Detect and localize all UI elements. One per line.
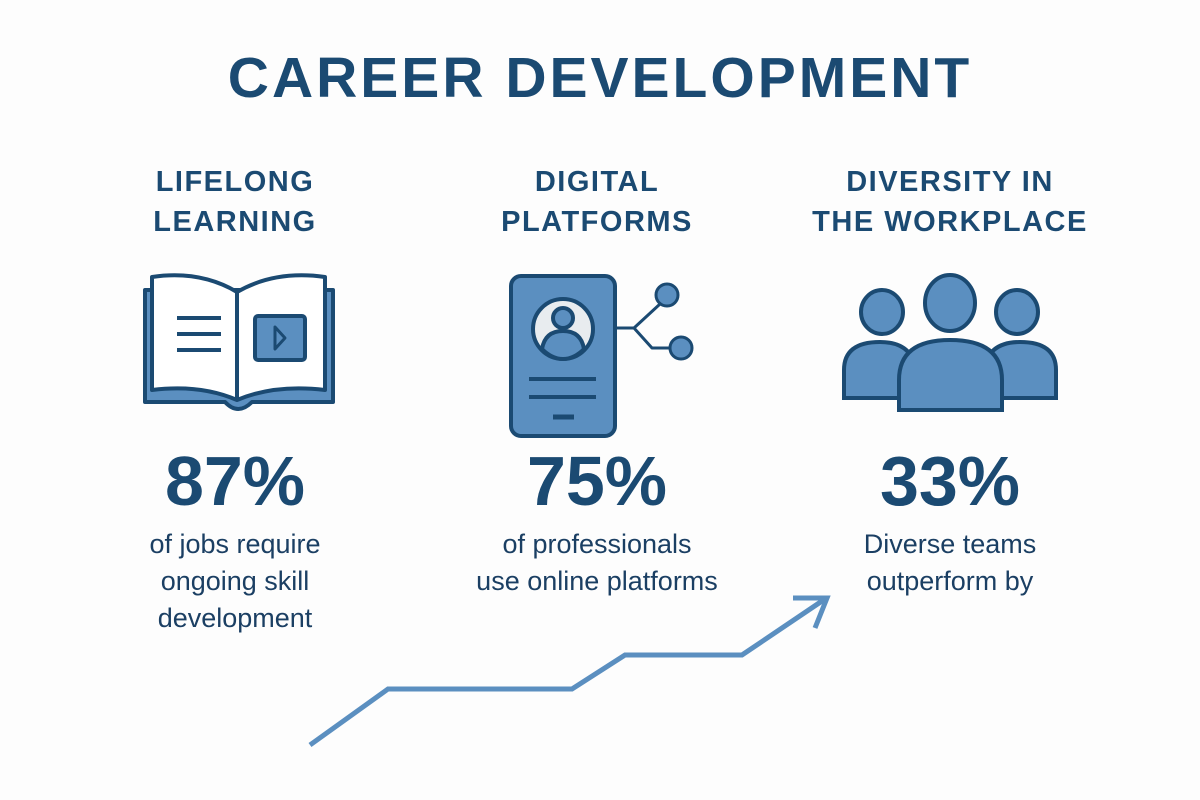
text: 33% description	[864, 529, 1036, 596]
stat: 87%: 87%	[165, 442, 305, 520]
text: 75% description	[476, 529, 718, 596]
heading: digital platforms: PLATFORMS	[501, 206, 693, 238]
heading: diversity: DIVERSITY IN	[846, 166, 1054, 198]
heading: lifelong learning: LIFELONG	[156, 166, 314, 198]
text: 33% description: outperform by	[867, 566, 1033, 596]
text: 75% description: use online platforms	[476, 566, 718, 596]
text: 87% description: development	[158, 603, 312, 633]
icon: people	[842, 273, 1058, 412]
heading: lifelong learning	[153, 166, 317, 238]
heading: diversity: THE WORKPLACE	[812, 206, 1088, 238]
icon: phone with profile	[509, 274, 694, 438]
heading: digital platforms	[501, 166, 693, 238]
title: CAREER DEVELOPMENT	[228, 46, 972, 110]
text: 87% description: of jobs require	[149, 529, 321, 559]
panel: lifelong learning	[143, 166, 335, 633]
text: 33% description: Diverse teams	[864, 529, 1036, 559]
text: 75% description: of professionals	[502, 529, 692, 559]
heading: digital platforms: DIGITAL	[535, 166, 659, 198]
stat: 33%: 33%	[880, 442, 1020, 520]
text: 87% description	[149, 529, 321, 633]
panel: diversity	[812, 166, 1088, 596]
text: 87% description: ongoing skill	[161, 566, 309, 596]
panel: digital platforms	[476, 166, 718, 596]
heading: lifelong learning: LEARNING	[153, 206, 317, 238]
stat: 75%: 75%	[527, 442, 667, 520]
icon: book	[143, 273, 335, 411]
heading: diversity	[812, 166, 1088, 238]
